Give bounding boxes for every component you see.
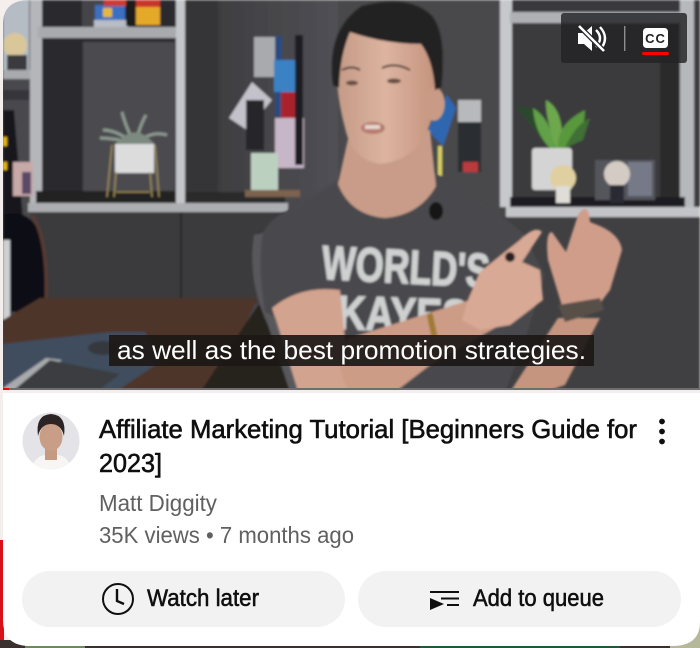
info panel <box>3 393 700 646</box>
wall badges left <box>254 37 276 77</box>
progress bar <box>3 388 700 390</box>
headphones stand <box>3 213 47 312</box>
caption: as well as the best promotion strategies. <box>117 335 586 365</box>
button: watch later: Watch later <box>147 585 259 612</box>
video still <box>0 0 700 393</box>
chair <box>252 232 302 392</box>
channel name: Matt Diggity <box>99 490 217 516</box>
icon: queue <box>430 591 459 610</box>
channel avatar <box>22 412 80 470</box>
button: watch later <box>22 571 345 627</box>
microphone <box>429 202 443 220</box>
button: add to queue <box>358 571 681 627</box>
icon: muted speaker <box>578 26 605 51</box>
toys on top shelf <box>95 5 125 26</box>
desk <box>3 298 258 390</box>
mute and captions controls <box>561 13 687 63</box>
right forearm <box>510 318 600 392</box>
head <box>336 14 436 164</box>
neck <box>338 130 436 218</box>
left upper arm <box>272 289 350 392</box>
shirt print <box>320 244 490 332</box>
watch <box>558 298 604 322</box>
icon: clock <box>103 584 133 614</box>
shirt print: KAYES <box>337 287 469 344</box>
icon: closed captions: CC <box>645 31 666 46</box>
office background <box>0 0 700 392</box>
right funko figures <box>595 160 655 200</box>
video title <box>99 414 637 478</box>
eyes and mouth <box>387 78 401 84</box>
monitor <box>3 90 30 100</box>
icon: more menu <box>659 419 665 444</box>
open hand <box>547 209 622 306</box>
pointing hand <box>462 230 543 330</box>
right plant <box>517 106 540 134</box>
video title: Affiliate Marketing Tutorial [Beginners Guide for <box>99 414 637 444</box>
bracelet <box>427 313 437 337</box>
forearm <box>346 300 496 388</box>
left funko figure <box>3 0 29 70</box>
left plant <box>100 112 167 145</box>
presenter <box>261 2 622 392</box>
view count and date: 35K views • 7 months ago <box>99 522 354 548</box>
video title: 2023] <box>99 448 162 478</box>
hair <box>332 2 443 90</box>
shirt print: WORLD'S <box>321 237 491 299</box>
torso in t-shirt <box>261 172 545 392</box>
wall badges right <box>427 95 456 146</box>
button: add to queue: Add to queue <box>473 585 604 612</box>
